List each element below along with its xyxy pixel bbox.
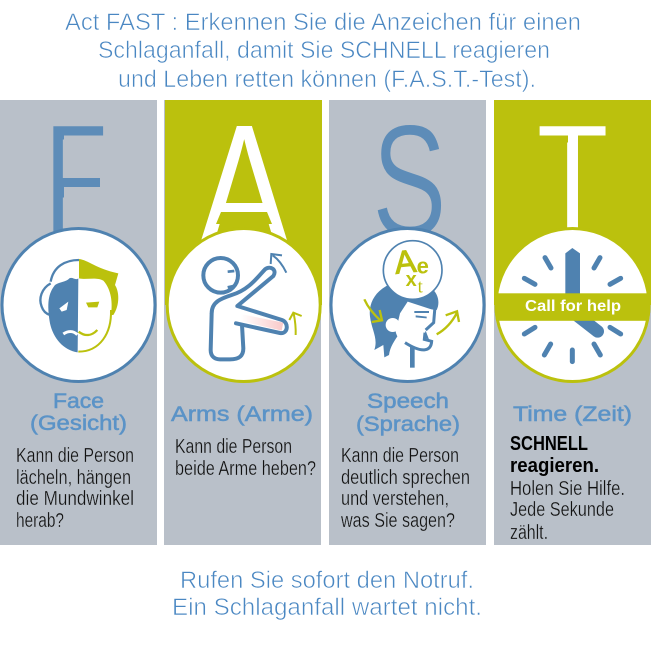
heading: Arms (Arme) (171, 402, 313, 426)
letter A: A (197, 87, 292, 294)
icon letters: t (418, 276, 424, 297)
face circle (2, 228, 155, 382)
letter F: F (45, 90, 107, 284)
title: Act FAST : Erkennen Sie die Anzeichen für einen (65, 9, 581, 36)
letter T: T (537, 90, 608, 284)
closing message: Ein Schlaganfall wartet nicht. (172, 594, 482, 621)
title: und Leben retten können (F.A.S.T.-Test). (118, 66, 536, 93)
text block: Jede Sekunde (510, 499, 614, 521)
text block: lächeln, hängen (16, 467, 131, 489)
text block: und verstehen, (341, 488, 449, 510)
text block: die Mundwinkel (16, 488, 134, 510)
text block: was Sie sagen? (340, 510, 455, 532)
closing message (172, 567, 482, 621)
panel: arms (164, 87, 322, 545)
text block (340, 445, 470, 532)
call for help band (490, 293, 651, 321)
text block (510, 433, 625, 544)
arms circle (167, 228, 320, 382)
heading: Face (53, 389, 104, 413)
heading (356, 389, 460, 436)
text block (175, 436, 316, 480)
clock circle (496, 228, 649, 382)
text block: beide Arme heben? (175, 458, 316, 480)
icon: clock (524, 248, 621, 362)
text block: herab? (16, 510, 64, 532)
panel: speech (329, 92, 486, 545)
icon: half sad half smiling face (40, 259, 118, 352)
panel: time (490, 90, 651, 545)
closing message: Rufen Sie sofort den Notruf. (180, 567, 474, 594)
text block: Holen Sie Hilfe. (510, 478, 625, 500)
heading: Time (Zeit) (513, 402, 632, 426)
text block: Kann die Person (341, 445, 459, 467)
title (65, 9, 581, 93)
icon: head with letters (364, 241, 459, 368)
icon letters: A (393, 243, 418, 281)
panel: face (0, 90, 157, 545)
icon letters: e (417, 253, 429, 278)
letter S: S (372, 92, 447, 271)
text block: Kann die Person (16, 445, 134, 467)
text block: zählt. (510, 522, 548, 544)
speech circle (331, 228, 484, 382)
heading: (Sprache) (356, 412, 460, 436)
icon: person raising arms (203, 254, 302, 359)
icon letters: x (406, 269, 417, 291)
text block: SCHNELL (510, 433, 588, 455)
text block: Kann die Person (175, 436, 292, 458)
icon letters (393, 243, 429, 297)
heading: (Gesicht) (30, 411, 127, 435)
text block: deutlich sprechen (341, 467, 470, 489)
call for help band: Call for help (525, 298, 621, 315)
text block: reagieren. (510, 455, 599, 477)
title: Schlaganfall, damit Sie SCHNELL reagieren (98, 37, 550, 64)
heading (30, 389, 127, 435)
text block (16, 445, 134, 532)
heading: Speech (367, 389, 449, 413)
